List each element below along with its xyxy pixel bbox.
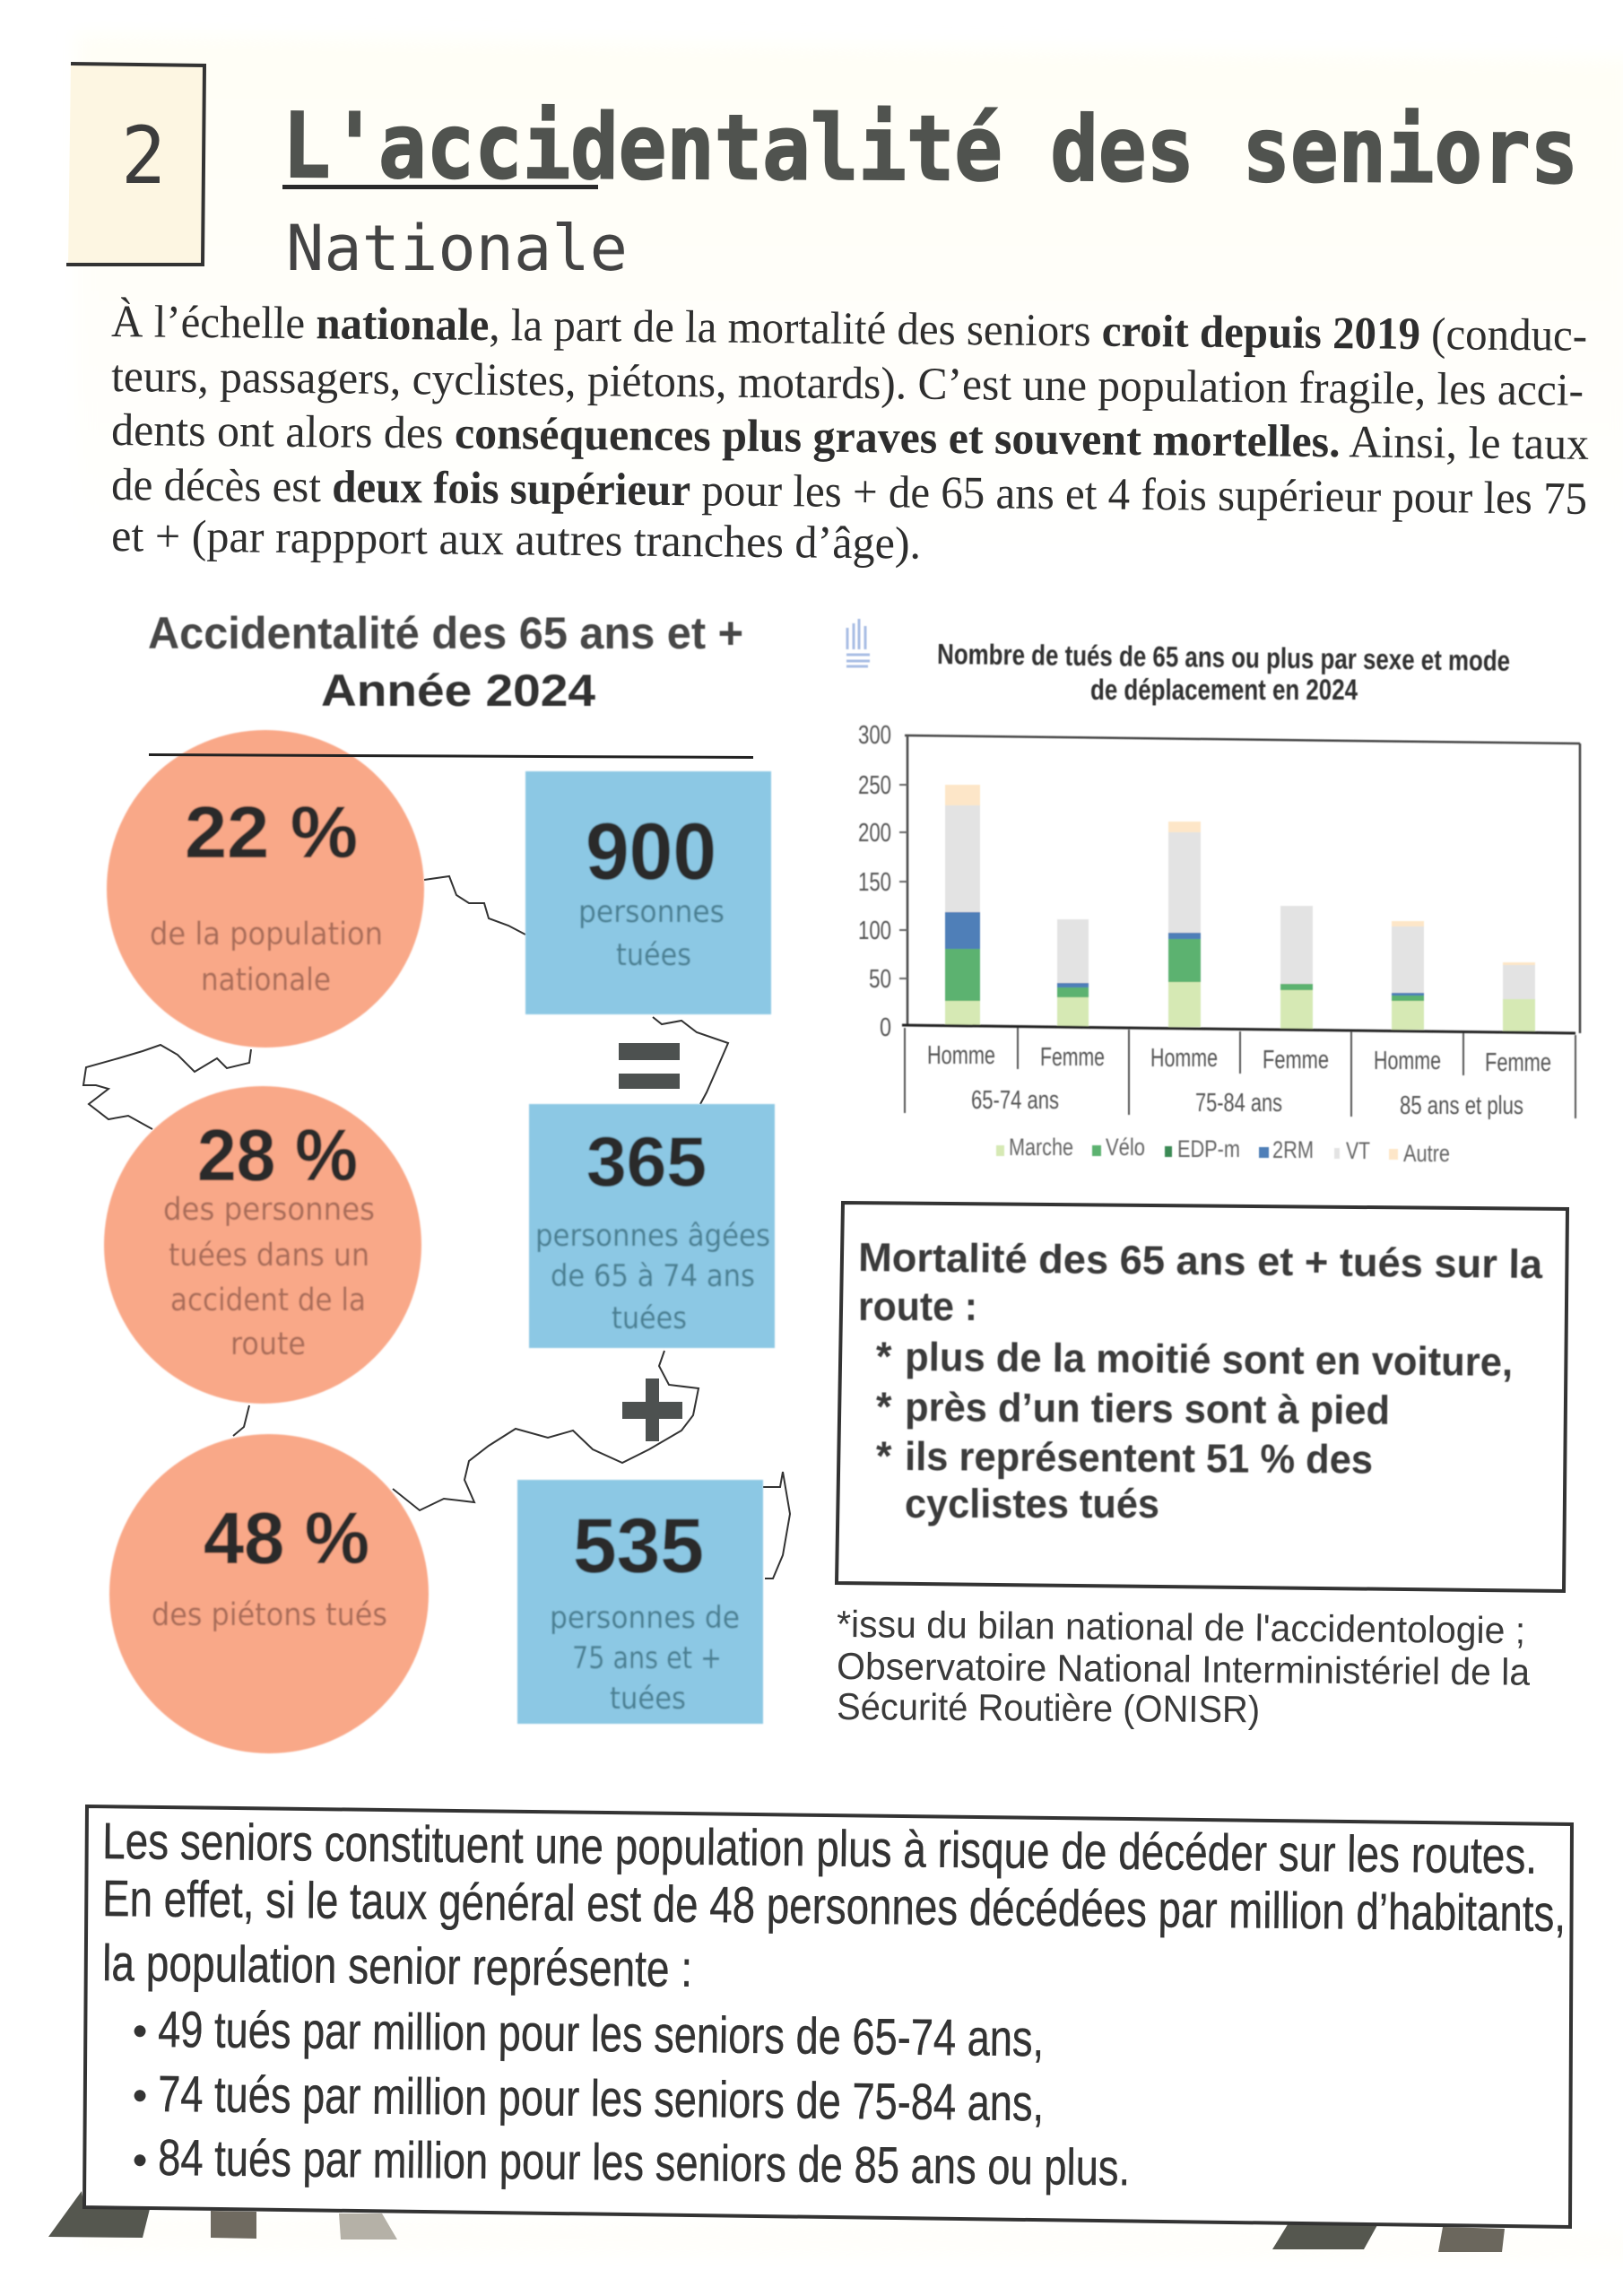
box: 900: [525, 771, 771, 1014]
box: 535: [517, 1480, 763, 1724]
y axis labels: 0: [880, 1013, 891, 1042]
callout: mortalité des 65 ans et +: route :: [858, 1283, 977, 1329]
heading rule: [149, 753, 753, 759]
category labels: Homme: [1374, 1047, 1441, 1075]
panel: bar chart deaths by sex and mode: [846, 619, 1580, 1167]
category labels: Femme: [1040, 1043, 1105, 1072]
box: 535: tuées: [610, 1681, 686, 1717]
box: 365: tuées: [612, 1300, 687, 1336]
circle: 28 %: [104, 1086, 421, 1404]
box: 365: personnes âgées: [535, 1218, 770, 1254]
callout: mortalité des 65 ans et +: *: [876, 1334, 892, 1379]
y axis labels: 100: [858, 917, 891, 945]
panel: seniors at risk summary: la population senior représente :: [102, 1935, 692, 1998]
circle: 48 %: 48 %: [204, 1498, 369, 1579]
panel: seniors at risk summary: 84 tués par million pour les seniors de 85 ans ou plus.: [158, 2129, 1130, 2196]
circle: 48 %: [109, 1434, 429, 1753]
map of France outline: [83, 876, 790, 1578]
circle: 28 %: route: [230, 1326, 306, 1362]
source note: *issu du bilan national de l'accidentologie ;: [837, 1603, 1525, 1651]
chart legend: Vélo: [1106, 1134, 1145, 1161]
panel: seniors at risk summary: 49 tués par million pour les seniors de 65-74 ans,: [158, 2001, 1044, 2067]
box: 365: 365: [586, 1122, 707, 1201]
callout: mortalité des 65 ans et +: près d’un tiers sont à pied: [905, 1384, 1390, 1433]
equals sign: [619, 1043, 680, 1089]
section number box: 2: [121, 109, 166, 202]
y axis labels: 250: [858, 771, 891, 800]
circle: 22 %: nationale: [201, 962, 331, 998]
bars: Homme 75-84: [1168, 822, 1201, 1027]
category labels: 65-74 ans: [971, 1086, 1059, 1115]
circle: 28 %: tuées dans un: [169, 1238, 369, 1274]
chart legend: Autre: [1403, 1140, 1450, 1167]
box: 535: personnes de: [550, 1600, 740, 1636]
box: 535: 75 ans et +: [572, 1640, 722, 1676]
chart legend: VT: [1346, 1137, 1370, 1164]
box: 365: de 65 à 74 ans: [551, 1258, 755, 1294]
category labels: 85 ans et plus: [1400, 1091, 1523, 1120]
road markings: [48, 2191, 1505, 2252]
y axis labels: 200: [858, 819, 891, 848]
box: 365: [529, 1104, 775, 1348]
panel: seniors at risk summary: •: [133, 2007, 147, 2054]
box: 900: tuées: [616, 937, 691, 973]
callout: mortalité des 65 ans et +: cyclistes tués: [905, 1481, 1159, 1526]
y axis labels: 300: [858, 721, 891, 750]
chart legend: Marche: [1009, 1134, 1073, 1161]
panel: seniors at risk summary: [84, 1806, 1572, 2227]
callout: mortalité des 65 ans et +: Mortalité des 65 ans et + tués sur la: [858, 1234, 1543, 1287]
circle: 48 %: des piétons tués: [152, 1597, 387, 1633]
subtitle: Nationale: [286, 212, 628, 285]
chart title: de déplacement en 2024: [1090, 674, 1358, 706]
chart legend: 2RM: [1272, 1136, 1314, 1163]
chart legend: EDP-m: [1177, 1135, 1240, 1162]
chart title: [937, 638, 1510, 706]
category labels: Femme: [1263, 1046, 1329, 1074]
category labels: Femme: [1485, 1048, 1551, 1077]
category labels: Homme: [1150, 1044, 1218, 1073]
y axis labels: 150: [858, 868, 891, 897]
circle: 28 %: 28 %: [197, 1115, 358, 1196]
circle: 22 %: de la population: [150, 917, 383, 952]
source note: [837, 1603, 1531, 1730]
source note: Observatoire National Interministériel de la: [837, 1645, 1531, 1693]
icon: ministry logo: [846, 619, 870, 666]
category labels: 75-84 ans: [1195, 1089, 1282, 1118]
callout: mortalité des 65 ans et +: [837, 1203, 1567, 1591]
intro paragraph: et + (par rappport aux autres tranches d’âge).: [111, 511, 921, 570]
plus sign: [622, 1378, 682, 1441]
y axis labels: [858, 721, 891, 1042]
source note: Sécurité Routière (ONISR): [837, 1685, 1260, 1730]
category labels: [927, 1041, 1551, 1120]
category labels: Homme: [927, 1041, 995, 1070]
box: 900: personnes: [578, 894, 725, 930]
chart frame and axes: [899, 735, 1580, 1118]
intro paragraph: À l’échelle nationale, la part de la mortalité des seniors croit depuis 2019 (conduc-: [111, 297, 1587, 361]
circle: 28 %: accident de la: [170, 1283, 366, 1318]
y axis labels: 50: [869, 965, 891, 994]
intro paragraph: [111, 297, 1589, 570]
bars: Femme 75-84: [1280, 906, 1313, 1029]
panel: seniors at risk summary: •: [133, 2072, 147, 2118]
intro paragraph: dents ont alors des conséquences plus graves et souvent mortelles. Ainsi, le taux: [111, 405, 1589, 470]
callout: mortalité des 65 ans et +: *: [876, 1433, 892, 1479]
callout: mortalité des 65 ans et +: ils représentent 51 % des: [905, 1433, 1373, 1483]
left panel heading: Année 2024: [321, 665, 595, 716]
intro paragraph: de décès est deux fois supérieur pour les + de 65 ans et 4 fois supérieur pour les 75: [111, 460, 1587, 525]
circle: 22 %: [107, 730, 424, 1048]
panel: accidentalité des 65 ans et +: [83, 608, 790, 1753]
circle: 22 %: 22 %: [185, 792, 358, 874]
callout: mortalité des 65 ans et +: *: [876, 1384, 892, 1430]
box: 535: 535: [573, 1503, 704, 1589]
box: 900: 900: [586, 807, 716, 897]
panel: seniors at risk summary: 74 tués par million pour les seniors de 75-84 ans,: [158, 2066, 1044, 2132]
circle: 28 %: des personnes: [163, 1192, 375, 1228]
left panel heading: Accidentalité des 65 ans et +: [148, 608, 743, 658]
intro paragraph: teurs, passagers, cyclistes, piétons, motards). C’est une population fragile, les acci-: [111, 352, 1584, 416]
bars: Homme 85+: [1392, 921, 1424, 1030]
callout: mortalité des 65 ans et +: plus de la moitié sont en voiture,: [905, 1334, 1513, 1385]
left panel heading: [148, 608, 743, 716]
section number box: [66, 64, 204, 265]
bars: Homme 65-74: [945, 785, 980, 1025]
bars: Femme 65-74: [1057, 919, 1089, 1026]
chart legend: [996, 1134, 1450, 1167]
panel: seniors at risk summary: •: [133, 2136, 147, 2183]
bars: Femme 85+: [1503, 962, 1535, 1031]
